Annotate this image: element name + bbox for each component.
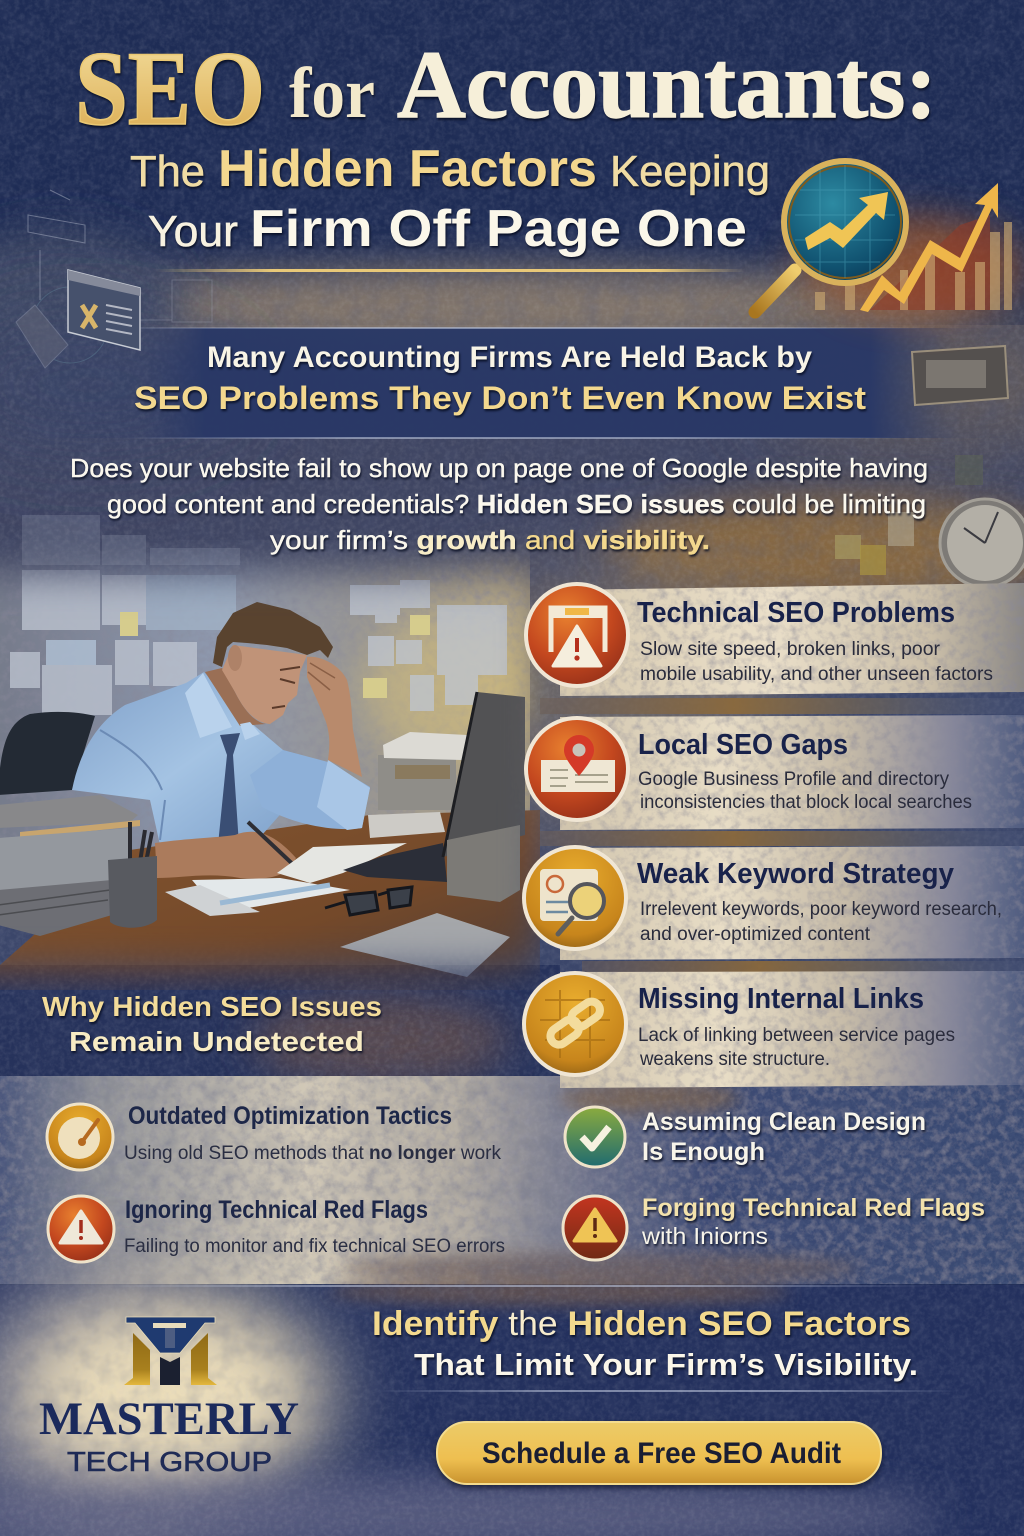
item: assuming clean design is enough: Is Enough <box>642 1138 765 1166</box>
call to action text: Identify the Hidden SEO Factors <box>372 1305 911 1343</box>
back paper pile <box>368 732 467 838</box>
item: assuming clean design is enough: Assuming Clean Design <box>642 1108 926 1136</box>
man <box>72 602 370 879</box>
card: local SEO gaps: Google Business Profile and directory <box>638 769 949 790</box>
item: forging technical red flags <box>563 1194 985 1260</box>
heading: why hidden SEO issues remain undetected: Why Hidden SEO Issues <box>42 991 382 1022</box>
intro paragraph: Does your website fail to show up on page one of Google despite having <box>70 453 928 483</box>
left stack of folders <box>0 795 140 936</box>
item: outdated optimization tactics: Outdated Optimization Tactics <box>128 1102 452 1130</box>
icon: warning over browser <box>526 584 628 686</box>
card: weak keyword strategy: and over-optimized content <box>640 924 871 945</box>
card: weak keyword strategy <box>524 846 1024 972</box>
papers on desk <box>165 843 407 916</box>
illustration: stressed accountant at desk <box>0 540 540 990</box>
logo mark <box>124 1317 217 1385</box>
item: forging technical red flags: with Iniorns <box>641 1223 768 1249</box>
icon: magnifying glass <box>755 161 906 312</box>
intro paragraph <box>70 453 928 555</box>
icon: check mark <box>565 1107 625 1167</box>
subtitle: Keeping <box>610 147 770 196</box>
title: for <box>289 53 375 133</box>
intro paragraph: your firm’s growth and visibility. <box>270 525 710 555</box>
office wall with pinned papers <box>0 540 540 870</box>
icon: wall clock <box>940 499 1024 587</box>
item: ignoring technical red flags <box>48 1196 505 1262</box>
call to action text <box>372 1305 918 1382</box>
intro paragraph: good content and credentials? Hidden SEO issues could be limiting <box>107 489 926 519</box>
card: missing internal links: Missing Internal Links <box>638 983 924 1015</box>
item: outdated optimization tactics <box>47 1102 501 1170</box>
logo: Masterly Tech Group: MASTERLY <box>39 1393 299 1445</box>
subheading: Many Accounting Firms Are Held Back by <box>207 341 812 374</box>
faint wall notes above the scene <box>22 515 240 565</box>
decorative wireframes: left <box>16 190 212 368</box>
subheading: SEO Problems They Don’t Even Know Exist <box>134 380 866 416</box>
logo: Masterly Tech Group <box>39 1317 299 1477</box>
notebook <box>340 913 510 977</box>
item: assuming clean design is enough <box>565 1107 926 1167</box>
icon: browser window with X <box>68 270 140 350</box>
card: missing internal links <box>524 971 1024 1088</box>
item: outdated optimization tactics: Using old SEO methods that no longer work <box>124 1143 501 1164</box>
subtitle <box>130 140 770 258</box>
call to action text: That Limit Your Firm’s Visibility. <box>414 1347 918 1382</box>
item: ignoring technical red flags: Ignoring Technical Red Flags <box>125 1196 428 1224</box>
logo: Masterly Tech Group: TECH GROUP <box>67 1446 272 1477</box>
icon: gauge <box>47 1104 113 1170</box>
desk <box>0 810 540 990</box>
decorative wall items: right <box>835 346 1008 575</box>
card: local SEO gaps <box>526 715 1024 846</box>
icon: warning triangle <box>48 1196 114 1262</box>
button: schedule a free SEO audit <box>437 1422 881 1484</box>
icon: chain link <box>524 973 626 1075</box>
icon: map pin on listing <box>526 718 628 820</box>
button: schedule a free SEO audit: Schedule a Free SEO Audit <box>482 1437 841 1470</box>
subtitle: Hidden Factors <box>218 140 597 198</box>
card: technical SEO problems: Slow site speed, broken links, poor <box>640 639 941 660</box>
subtitle: Your <box>148 207 238 256</box>
card: local SEO gaps: Local SEO Gaps <box>638 729 848 761</box>
laptop and monitor <box>343 692 525 902</box>
subtitle: The <box>130 147 205 196</box>
card: technical SEO problems: Technical SEO Problems <box>637 597 955 629</box>
heading: why hidden SEO issues remain undetected <box>42 991 382 1057</box>
card: missing internal links: Lack of linking between service pages <box>638 1025 955 1046</box>
icon: magnifier on document <box>524 847 626 949</box>
card: technical SEO problems <box>526 583 1024 714</box>
title rule <box>155 269 745 272</box>
heading: why hidden SEO issues remain undetected: Remain Undetected <box>69 1026 364 1057</box>
title <box>75 30 937 147</box>
card: technical SEO problems: mobile usability, and other unseen factors <box>640 664 993 685</box>
item: forging technical red flags: Forging Technical Red Flags <box>642 1194 985 1222</box>
title: Accountants: <box>397 31 937 138</box>
icon: warning triangle <box>563 1196 627 1260</box>
growth chart with arrow <box>815 183 1012 315</box>
item: ignoring technical red flags: Failing to monitor and fix technical SEO errors <box>124 1236 505 1257</box>
title: SEO <box>75 30 265 147</box>
glasses <box>325 887 412 915</box>
subheading <box>134 341 866 416</box>
card: weak keyword strategy: Irrelevent keywords, poor keyword research, <box>640 899 1002 920</box>
card: missing internal links: weakens site structure. <box>639 1049 830 1070</box>
card: local SEO gaps: inconsistencies that block local searches <box>640 792 972 813</box>
chair <box>0 712 95 795</box>
card: weak keyword strategy: Weak Keyword Strategy <box>637 858 954 890</box>
pen holder <box>108 822 157 928</box>
subtitle: Firm Off Page One <box>250 200 747 258</box>
